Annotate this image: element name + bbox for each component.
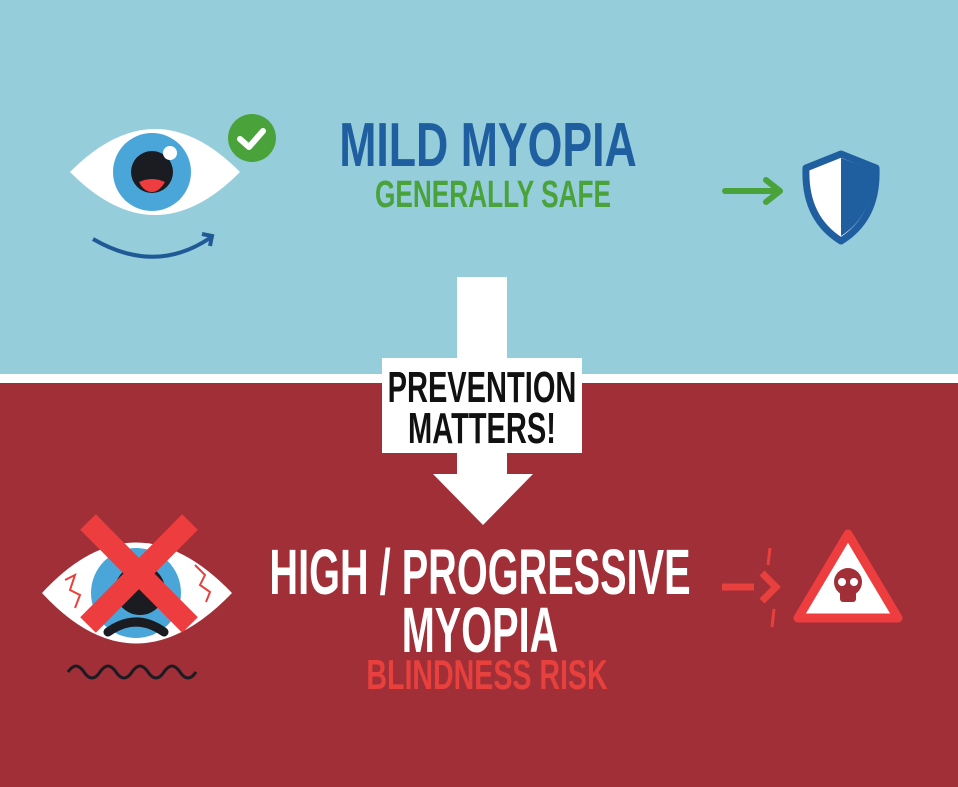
- title: mild myopia: MILD MYOPIA: [339, 111, 637, 180]
- icon: shield: [802, 150, 880, 244]
- title: high progressive myopia: MYOPIA: [402, 594, 558, 666]
- subtitle: blindness risk: BLINDNESS RISK: [366, 651, 608, 698]
- title: high progressive myopia: HIGH / PROGRESSIVE: [269, 536, 691, 608]
- title: high progressive myopia: [269, 536, 691, 666]
- icon: warning skull: [794, 530, 902, 622]
- callout: prevention matters: MATTERS!: [408, 404, 556, 453]
- panel: bottom high myopia: [0, 383, 958, 787]
- icon: green arrow: [722, 177, 783, 205]
- icon: broken red arrow: [722, 548, 781, 628]
- subtitle: generally safe: GENERALLY SAFE: [375, 174, 611, 216]
- panel: top mild myopia: [0, 0, 958, 374]
- callout: prevention matters: [382, 358, 582, 453]
- icon: damaged eye: [42, 514, 232, 680]
- icon: healthy eye: [70, 114, 276, 259]
- callout: prevention matters: PREVENTION: [388, 363, 576, 412]
